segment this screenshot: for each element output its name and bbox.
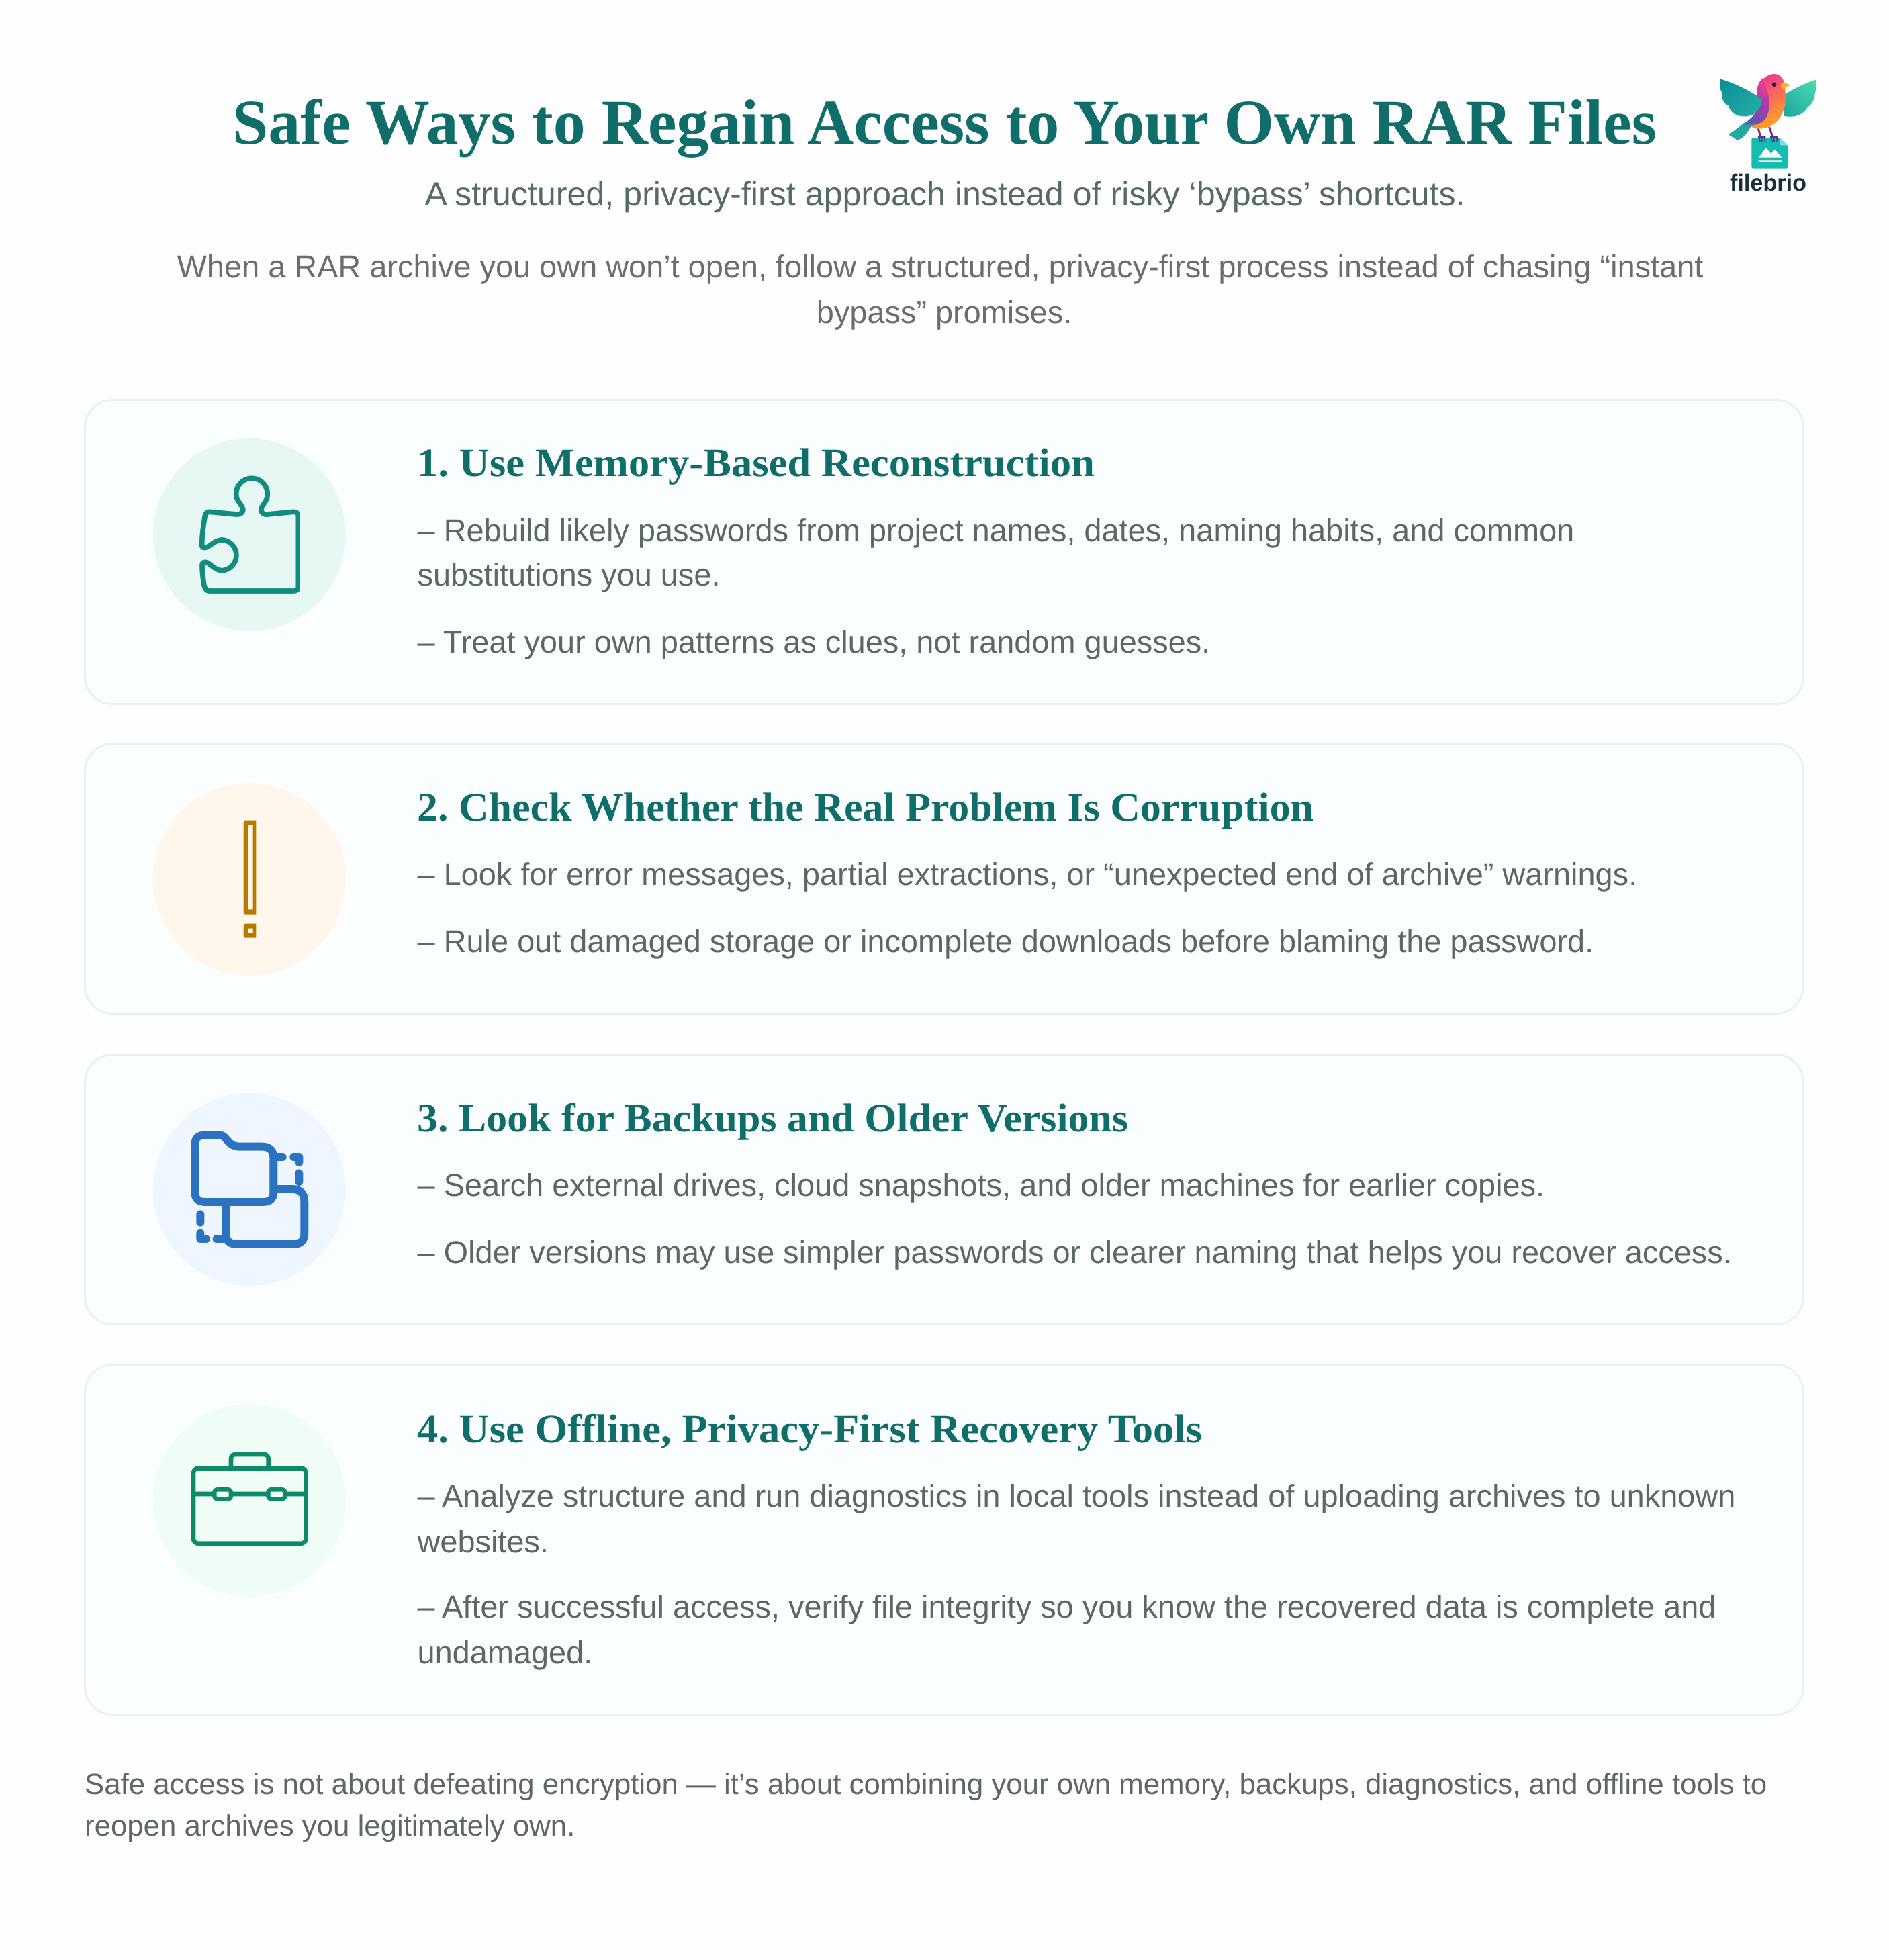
- icon: exclamation mark: [153, 783, 346, 976]
- icon: bird legs: [1758, 128, 1773, 138]
- panel: step 3 backups and older versions: [85, 1054, 1804, 1324]
- icon: document: [1751, 138, 1788, 169]
- body text: [418, 1168, 1732, 1270]
- icon: bird beak: [1781, 83, 1790, 89]
- panel: step 2 check for corruption: [85, 744, 1804, 1014]
- body text: – Search external drives, cloud snapshots, and older machines for earlier copies.: [418, 1168, 1545, 1203]
- body text: substitutions you use.: [418, 557, 720, 592]
- icon: mountain: [1759, 148, 1782, 158]
- footer note: reopen archives you legitimately own.: [85, 1810, 575, 1842]
- logo wordmark: filebrio: [1730, 170, 1806, 196]
- body text: websites.: [416, 1524, 549, 1559]
- subtitle: A structured, privacy-first approach instead of risky ‘bypass’ shortcuts.: [424, 175, 1465, 213]
- panel: step 1 memory-based reconstruction: [85, 400, 1804, 704]
- icon: puzzle piece: [153, 438, 346, 631]
- icon: bird left wing: [1720, 79, 1761, 116]
- icon: bird belly shade: [1743, 78, 1769, 125]
- icon: bird eye: [1772, 82, 1776, 87]
- icon: toolbox briefcase: [153, 1404, 346, 1597]
- heading: 1. Use Memory-Based Reconstruction: [417, 440, 1095, 485]
- body text: – Rule out damaged storage or incomplete downloads before blaming the password.: [418, 924, 1594, 959]
- icon: bird body: [1748, 74, 1786, 129]
- heading: 3. Look for Backups and Older Versions: [417, 1096, 1128, 1140]
- footer note: [85, 1768, 1767, 1842]
- body text: – Look for error messages, partial extractions, or “unexpected end of archive” warnings.: [418, 857, 1637, 892]
- icon: bird feet: [1759, 137, 1778, 142]
- body text: [416, 1479, 1735, 1670]
- logo: filebrio: [1720, 74, 1816, 196]
- panel: step 4 offline recovery tools: [85, 1364, 1804, 1715]
- intro text: bypass” promises.: [817, 295, 1072, 330]
- intro text: [177, 249, 1703, 330]
- heading: 4. Use Offline, Privacy-First Recovery Tools: [417, 1407, 1202, 1451]
- heading: 2. Check Whether the Real Problem Is Corruption: [417, 785, 1314, 829]
- icon: bird right wing: [1784, 80, 1816, 117]
- icon: bird tail: [1729, 123, 1751, 140]
- body text: – Older versions may use simpler passwords or clearer naming that helps you recover access.: [418, 1235, 1732, 1270]
- body text: – Treat your own patterns as clues, not random guesses.: [418, 624, 1210, 659]
- body text: – Analyze structure and run diagnostics in local tools instead of uploading archives to unknown: [418, 1479, 1735, 1513]
- intro text: When a RAR archive you own won’t open, follow a structured, privacy-first process instead of chasing “instant: [177, 249, 1703, 284]
- body text: – After successful access, verify file integrity so you know the recovered data is complete and: [418, 1589, 1716, 1624]
- footer note: Safe access is not about defeating encryption — it’s about combining your own memory, backups, diagnostics, and offline tools to: [85, 1768, 1767, 1801]
- body text: [418, 513, 1574, 659]
- body text: [418, 857, 1637, 959]
- body text: – Rebuild likely passwords from project names, dates, naming habits, and common: [418, 513, 1574, 548]
- title: Safe Ways to Regain Access to Your Own RAR Files: [232, 87, 1657, 158]
- icon: folders: [153, 1093, 346, 1286]
- body text: undamaged.: [418, 1635, 592, 1670]
